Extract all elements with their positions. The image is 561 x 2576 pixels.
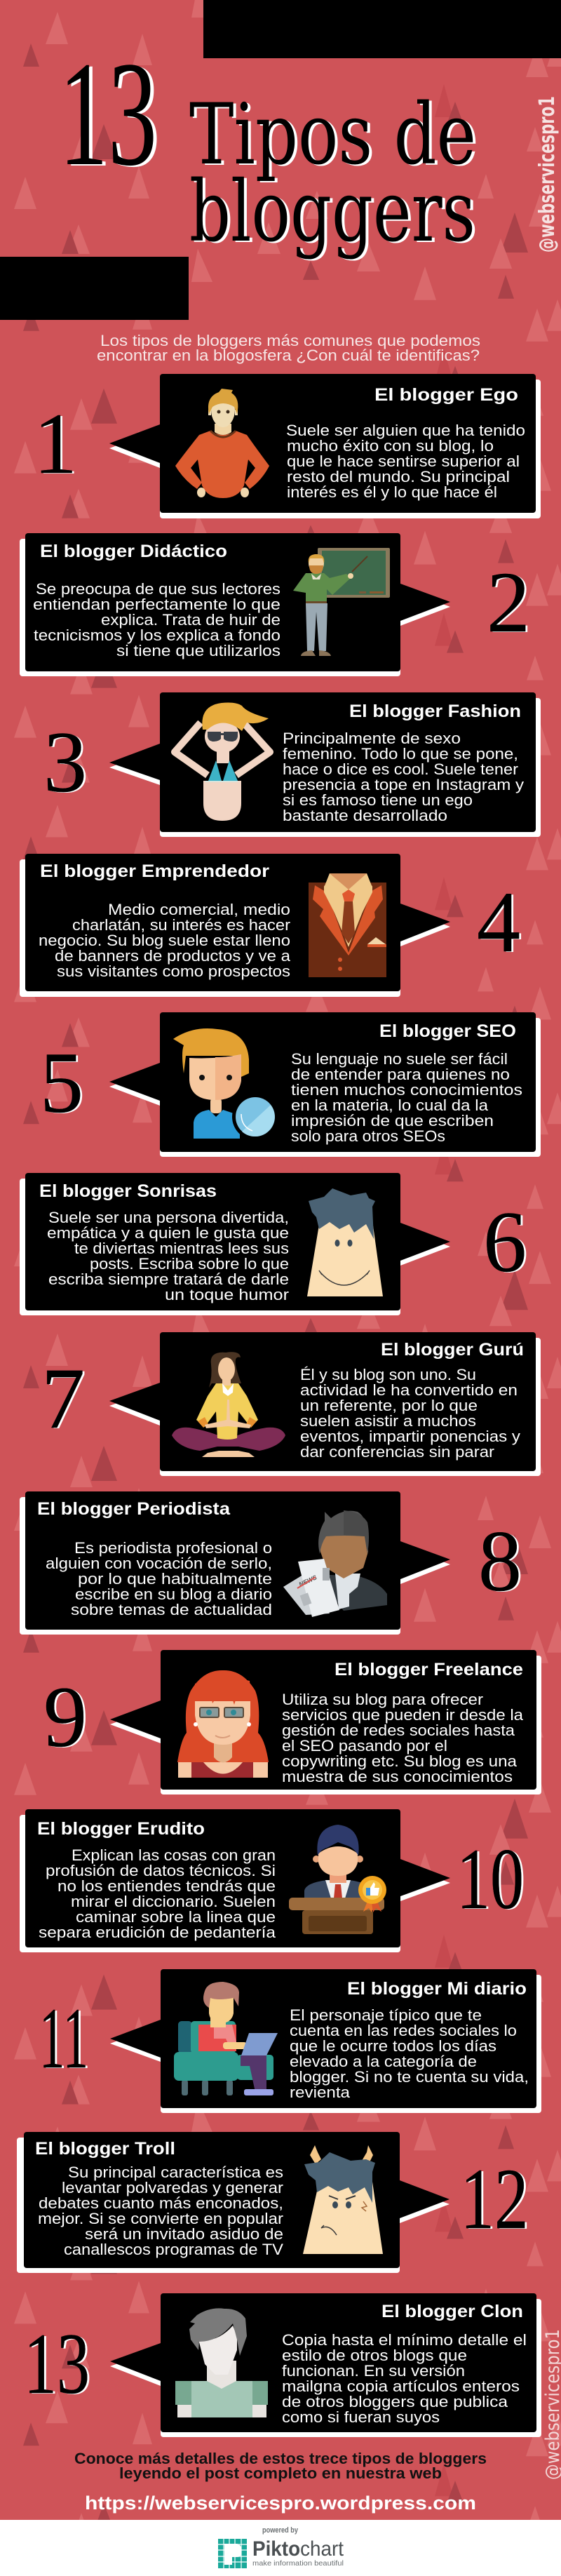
- heading: El blogger Ego: [374, 385, 518, 405]
- Piktochart wordmark: Piktochart: [252, 2537, 344, 2561]
- description: un toque humor: [165, 1286, 289, 1303]
- card 10: Erudito: [20, 1809, 526, 1952]
- description: [291, 1050, 522, 1145]
- description: en la materia, lo cual da la: [291, 1096, 489, 1114]
- description: funcionan. En su versión: [282, 2362, 465, 2380]
- heading: El blogger Troll: [35, 2139, 175, 2159]
- icon: journalist with newspapers: NEWS: [298, 1574, 318, 1588]
- description: mailgna copia artículos enteros: [282, 2377, 520, 2395]
- speech panel: [109, 692, 541, 837]
- icon: journalist with newspapers: [283, 1510, 387, 1617]
- description: no los entiendes tendrás que: [58, 1877, 276, 1895]
- description: solo para otros SEOs: [291, 1127, 445, 1145]
- card 7: Gurú: [41, 1332, 541, 1476]
- title: Tipos de: [189, 86, 476, 184]
- heading: El blogger Clon: [381, 2302, 523, 2321]
- description: [39, 901, 291, 980]
- card 2: Didáctico: [20, 533, 532, 676]
- icon: troll face with horns: [303, 2145, 383, 2254]
- number 11: 11: [39, 1990, 88, 2086]
- description: que le hace sentirse superior al: [287, 452, 520, 470]
- description: blogger. Si no te cuenta su vida,: [290, 2068, 529, 2086]
- description: [39, 1846, 276, 1941]
- description: escribe en su blog a diario: [75, 1585, 272, 1603]
- description: posts. Escriba sobre lo que: [90, 1255, 289, 1273]
- icon: teacher at blackboard: [293, 548, 390, 656]
- description: mucho éxito con su blog, lo: [287, 437, 494, 455]
- description: hace o dice es cool. Suele tener: [283, 760, 518, 778]
- Piktochart wordmark: make information beautiful: [252, 2559, 344, 2568]
- description: estilo de otros blogs que: [282, 2347, 467, 2364]
- number 5: 5: [42, 1035, 86, 1132]
- speech panel: [20, 1173, 450, 1315]
- description: presencia a tope en Instagram y: [283, 776, 524, 793]
- card 8: Periodista: [20, 1491, 524, 1635]
- number 10: 10: [459, 1832, 526, 1928]
- description: de entender para quienes no: [291, 1066, 510, 1083]
- description: servicios que pueden ir desde la: [282, 1706, 524, 1724]
- description: actividad le ha convertido en: [300, 1381, 518, 1399]
- description: impresión de que escriben: [291, 1112, 494, 1129]
- description: [38, 2164, 283, 2258]
- description: sus visitantes como prospectos: [57, 962, 290, 980]
- number 2: 2: [487, 554, 530, 650]
- description: entiendan perfectamente lo que: [33, 596, 280, 613]
- description: tienen muchos conocimientos: [291, 1081, 522, 1099]
- description: caminar sobre la linea que: [76, 1908, 276, 1926]
- card 11: Mi diario: [39, 1969, 541, 2113]
- number 13: 13: [26, 2316, 92, 2413]
- icon: ego man: [175, 389, 269, 498]
- heading: El blogger Gurú: [381, 1340, 524, 1360]
- description: El personaje típico que te: [290, 2006, 482, 2024]
- title: Tipos de: [192, 88, 479, 185]
- title: 13: [59, 31, 157, 197]
- url: https://webservicespro.wordpress.com: [85, 2493, 476, 2514]
- speech panel: [20, 854, 450, 997]
- icon: Piktochart logo: [218, 2539, 247, 2568]
- description: que le ocurre todos los días: [290, 2037, 496, 2055]
- description: tecnicismos y los explica a fondo: [34, 626, 280, 644]
- description: elevado a la categoría de: [290, 2053, 477, 2070]
- description: Él y su blog son uno. Su: [300, 1366, 476, 1383]
- number 8: 8: [480, 1514, 524, 1610]
- description: copywriting etc. Su blog es una: [282, 1752, 518, 1770]
- description: [282, 2331, 527, 2426]
- icon: smiling face: [307, 1188, 383, 1296]
- speech panel: [109, 1332, 541, 1476]
- description: cuenta en las redes sociales lo: [290, 2022, 517, 2039]
- description: [290, 2006, 529, 2101]
- title: bloggers: [189, 163, 475, 261]
- number 3: 3: [43, 714, 87, 810]
- description: suelen asistir a muchos: [300, 1412, 476, 1430]
- description: el SEO pasando por el: [282, 1737, 447, 1755]
- description: charlatán, su interés es hacer: [72, 916, 290, 934]
- icon: clone man: [175, 2308, 268, 2417]
- card 6: Sonrisas: [20, 1173, 529, 1315]
- number 9: 9: [43, 1669, 87, 1765]
- description: Explican las cosas con gran: [72, 1846, 276, 1864]
- description: [300, 1366, 520, 1461]
- description: si es famoso tiene un ego: [283, 791, 473, 809]
- description: [283, 730, 524, 824]
- title: [59, 31, 479, 262]
- description: mirar el diccionario. Suelen: [71, 1893, 276, 1910]
- description: por lo que habitualmente: [78, 1570, 272, 1588]
- heading: El blogger Sonrisas: [39, 1181, 217, 1201]
- number 9: 9: [46, 1670, 89, 1766]
- description: explica. Trata de huir de: [101, 611, 280, 629]
- description: Es periodista profesional o: [74, 1539, 272, 1557]
- number 12: 12: [460, 2151, 529, 2247]
- description: de otros bloggers que publica: [282, 2393, 508, 2410]
- description: un referente, por lo que: [300, 1397, 478, 1414]
- black banner left: [0, 257, 189, 320]
- description: Suele ser alguien que ha tenido: [286, 422, 525, 439]
- description: negocio. Su blog suele estar lleno: [39, 932, 290, 949]
- icon: person on armchair with laptop: [174, 1982, 278, 2095]
- number 4: 4: [477, 874, 520, 970]
- black banner top right: [203, 0, 561, 58]
- description: Copia hasta el mínimo detalle el: [282, 2331, 527, 2349]
- speech panel: [20, 1491, 450, 1635]
- card 4: Emprendedor: [20, 854, 522, 997]
- description: Se preocupa de que sus lectores: [36, 580, 280, 598]
- description: escriba siempre tratará de darle: [48, 1270, 289, 1288]
- number 12: 12: [463, 2152, 530, 2248]
- powered by: powered by: [262, 2526, 299, 2535]
- closing call to action: Conoce más detalles de estos trece tipos de bloggers: [74, 2450, 487, 2467]
- intro text: [97, 332, 480, 364]
- description: [33, 580, 280, 659]
- description: Su principal característica es: [68, 2164, 283, 2181]
- description: empática y a quien le gusta que: [47, 1224, 289, 1242]
- card 13: Clon: [24, 2293, 541, 2437]
- description: será un invitado asiduo de: [85, 2225, 283, 2243]
- card 9: Freelance: [43, 1650, 541, 1795]
- speech panel: [110, 1969, 541, 2113]
- description: Su lenguaje no suele ser fácil: [291, 1050, 508, 1068]
- heading: El blogger SEO: [379, 1021, 516, 1041]
- intro text: Los tipos de bloggers más comunes que podemos: [100, 332, 480, 349]
- description: Medio comercial, medio: [108, 901, 290, 918]
- speech panel: [110, 1650, 541, 1795]
- description: [46, 1539, 272, 1618]
- icon: fashion woman: [175, 703, 270, 821]
- intro text: encontrar en la blogosfera ¿Con cuál te identificas?: [97, 347, 480, 364]
- heading: El blogger Fashion: [349, 702, 521, 721]
- icon: meditating woman: [172, 1352, 285, 1457]
- number 6: 6: [483, 1194, 527, 1290]
- number 1: 1: [36, 396, 79, 492]
- description: mejor. Si se convierte en popular: [38, 2210, 283, 2227]
- heading: El blogger Didáctico: [40, 542, 227, 561]
- closing call to action: [74, 2450, 487, 2482]
- description: separa erudición de pedantería: [39, 1924, 276, 1941]
- speech panel: [17, 2132, 450, 2273]
- description: alguien con vocación de serlo,: [46, 1555, 272, 1572]
- number 8: 8: [478, 1513, 522, 1609]
- description: resto del mundo. Su principal: [287, 468, 510, 485]
- description: revienta: [290, 2084, 351, 2101]
- speech panel: [109, 1012, 541, 1157]
- number 11: [39, 1990, 90, 2087]
- description: femenino. Todo lo que se pone,: [283, 745, 518, 763]
- description: eventos, impartir ponencias y: [300, 1428, 520, 1445]
- description: como si fueran suyos: [282, 2408, 440, 2426]
- description: si tiene que utilizarlos: [116, 642, 280, 659]
- heading: El blogger Mi diario: [347, 1979, 527, 1999]
- number 7: 7: [43, 1351, 87, 1447]
- icon: speaker at podium with medal: [289, 1825, 386, 1934]
- card 3: Fashion: [43, 692, 541, 837]
- description: de banners de productos y ve a: [55, 947, 291, 965]
- number 13: 13: [24, 2316, 90, 2412]
- description: sobre temas de actualidad: [71, 1601, 272, 1618]
- card 12: Troll: [17, 2132, 530, 2273]
- handle top: @webservicespro1: [535, 96, 560, 253]
- speech panel: [109, 374, 541, 518]
- description: levantar polvaredas y generar: [62, 2179, 283, 2196]
- card 1: Ego: [34, 374, 541, 518]
- speech panel: [20, 1809, 450, 1952]
- heading: El blogger Erudito: [37, 1819, 205, 1839]
- number 6: 6: [485, 1195, 529, 1291]
- description: profusión de datos técnicos. Si: [46, 1862, 276, 1879]
- footer band: [0, 2520, 561, 2576]
- description: Suele ser una persona divertida,: [48, 1209, 289, 1226]
- icon: suit: [309, 873, 386, 977]
- card 5: SEO: [40, 1012, 541, 1157]
- description: [47, 1209, 289, 1303]
- number 7: 7: [41, 1350, 85, 1447]
- speech panel: [110, 2293, 541, 2437]
- description: Principalmente de sexo: [283, 730, 461, 747]
- description: [282, 1691, 524, 1785]
- heading: El blogger Emprendedor: [40, 861, 269, 881]
- number 5: 5: [40, 1035, 83, 1131]
- title: 13: [62, 32, 161, 199]
- number 11: 11: [41, 1991, 90, 2087]
- description: muestra de sus conocimientos: [282, 1768, 513, 1785]
- number 2: 2: [489, 555, 532, 651]
- description: gestión de redes sociales hasta: [282, 1722, 515, 1739]
- description: te diviertas mientras lees sus: [74, 1240, 289, 1257]
- description: bastante desarrollado: [283, 807, 447, 824]
- description: canallescos programas de TV: [64, 2241, 283, 2258]
- heading: El blogger Periodista: [37, 1499, 231, 1519]
- number 10: 10: [457, 1831, 524, 1927]
- heading: El blogger Freelance: [334, 1660, 523, 1679]
- description: interés es él y lo que hace él: [287, 483, 497, 501]
- icon: SEO man with magnifier: [173, 1028, 278, 1140]
- closing call to action: leyendo el post completo en nuestra web: [119, 2464, 442, 2482]
- number 1: 1: [34, 396, 77, 492]
- number 3: 3: [46, 715, 89, 811]
- title: bloggers: [192, 165, 478, 262]
- speech panel: [20, 533, 450, 676]
- number 4: 4: [479, 875, 522, 971]
- description: dar conferencias sin parar: [300, 1443, 494, 1461]
- icon: red-haired freelancer: [177, 1670, 269, 1778]
- description: [286, 422, 525, 501]
- description: debates cuanto más enconados,: [39, 2194, 283, 2212]
- description: Utiliza su blog para ofrecer: [282, 1691, 483, 1708]
